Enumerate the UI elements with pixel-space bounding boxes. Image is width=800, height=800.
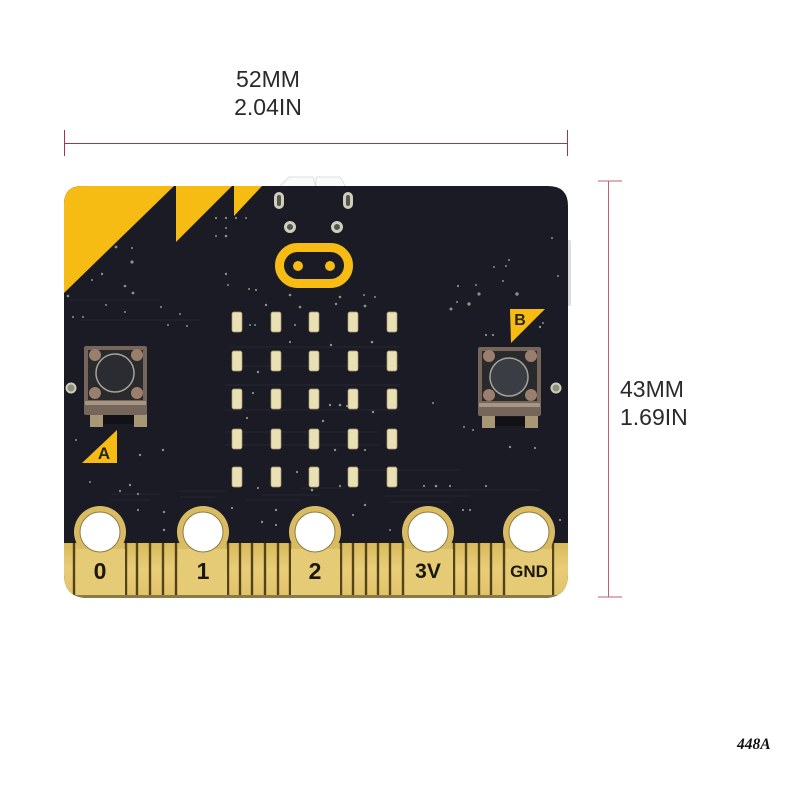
pin labels: 1 xyxy=(197,558,210,584)
usb solder pads xyxy=(276,194,352,232)
hole: 1 xyxy=(183,512,223,552)
yellow corner stripes xyxy=(60,186,262,293)
height label: 1.69IN xyxy=(620,404,688,430)
pin labels: 2 xyxy=(309,558,321,584)
mounting pads xyxy=(66,384,560,392)
solder specks xyxy=(67,217,561,531)
height dimension line xyxy=(598,181,622,597)
label A: A xyxy=(98,444,110,463)
button A xyxy=(84,346,147,427)
circuit traces xyxy=(70,300,540,502)
board base xyxy=(64,186,568,598)
logo oval xyxy=(280,248,348,284)
button B xyxy=(478,347,541,428)
contact rings xyxy=(74,506,555,545)
height label xyxy=(620,376,688,430)
label A xyxy=(82,430,117,463)
connector slots xyxy=(74,543,553,595)
gold edge connector xyxy=(60,506,572,599)
width label: 52MM xyxy=(236,66,300,92)
usb connector xyxy=(279,177,346,187)
pin labels: GND xyxy=(510,562,548,581)
gold band xyxy=(60,543,572,595)
pad fill xyxy=(76,549,552,595)
hole: 2 xyxy=(295,512,335,552)
width label xyxy=(234,66,302,120)
product code: 448A xyxy=(736,736,771,753)
hole: GND xyxy=(509,512,549,552)
hole: 0 xyxy=(80,512,120,552)
side connector xyxy=(563,240,571,306)
label B: B xyxy=(514,312,526,329)
label B xyxy=(510,309,545,343)
hole: 3V xyxy=(408,512,448,552)
pin labels: 0 xyxy=(94,558,106,584)
circuit board xyxy=(60,186,572,599)
led matrix xyxy=(232,312,397,487)
width label: 2.04IN xyxy=(234,94,302,120)
height label: 43MM xyxy=(620,376,684,402)
pin labels: 3V xyxy=(415,560,441,583)
width dimension line xyxy=(64,130,568,156)
pin labels xyxy=(94,563,548,579)
